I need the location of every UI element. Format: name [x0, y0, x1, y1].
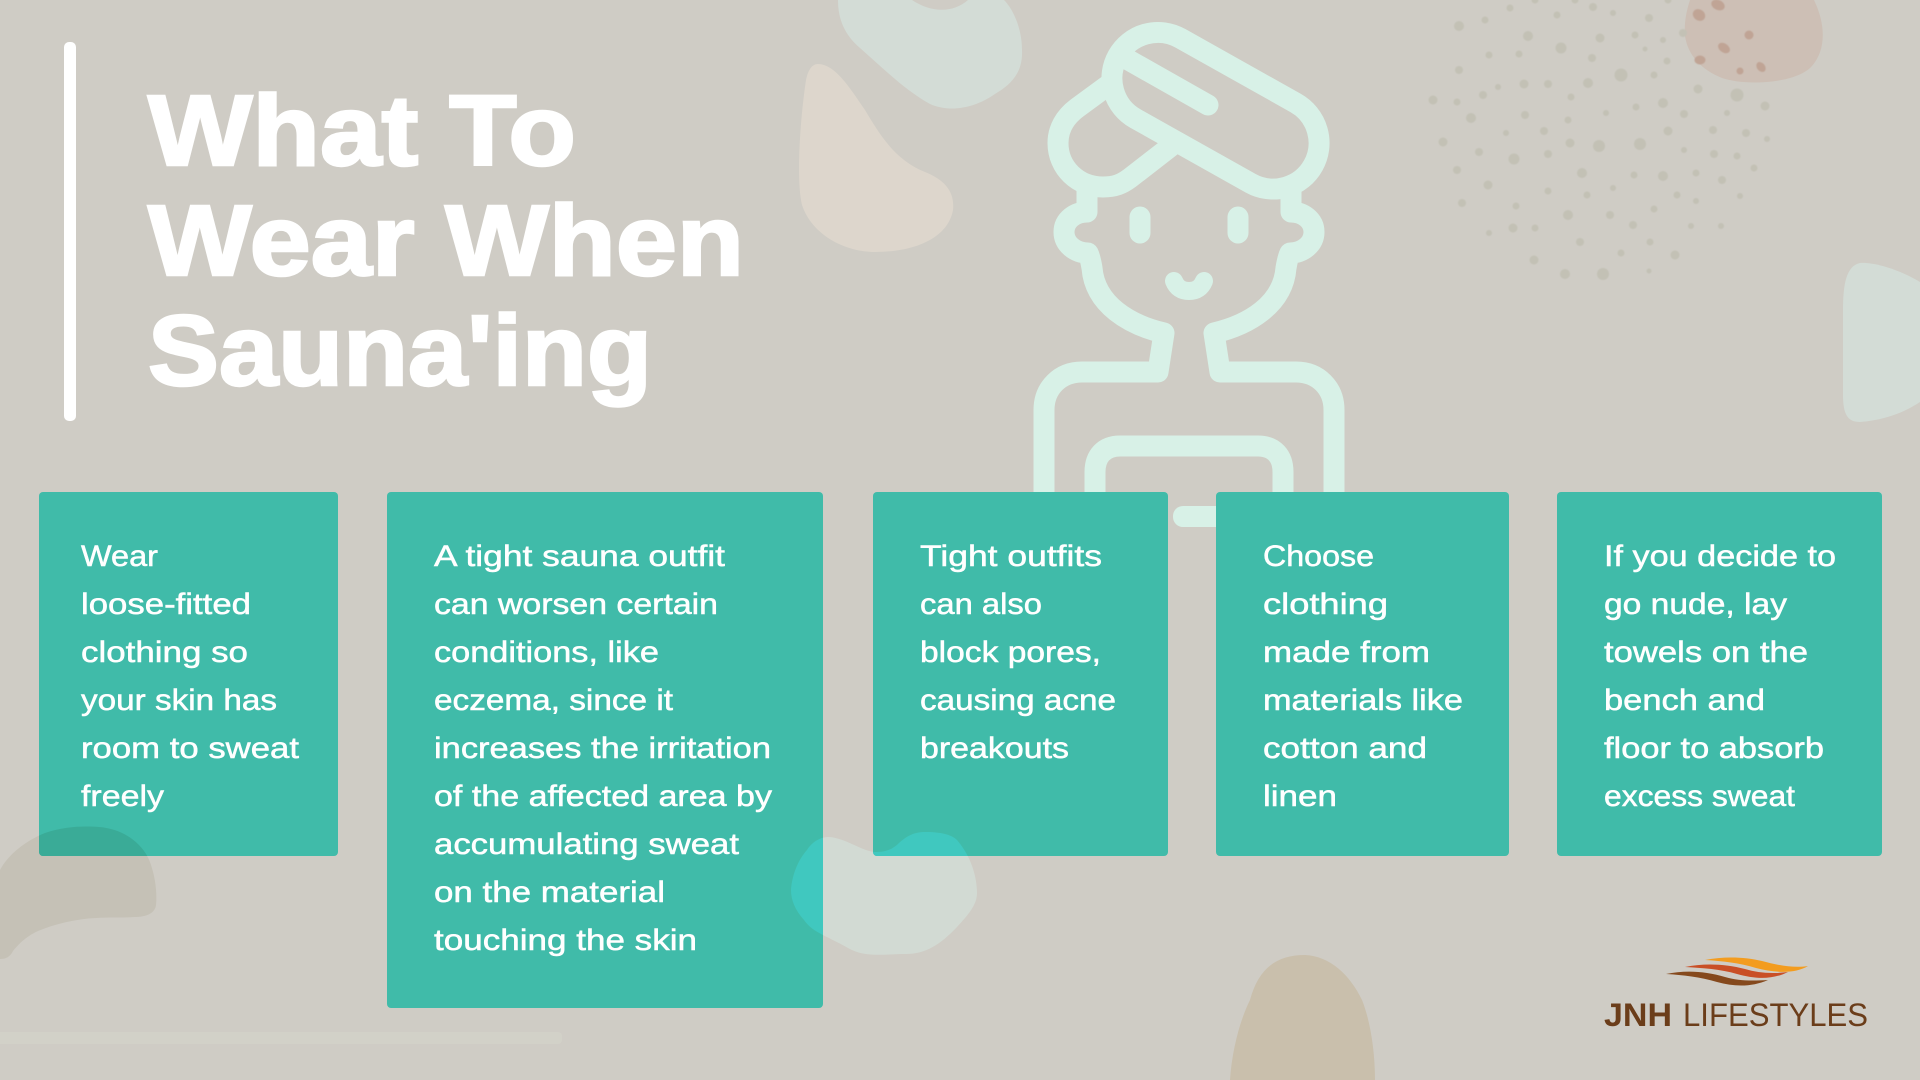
card 5: If you decide to	[1604, 540, 1836, 573]
title: What To	[148, 75, 576, 187]
logo: JNH Lifestyles	[1604, 957, 1868, 1033]
card 5	[1557, 492, 1882, 856]
card 4: cotton and	[1263, 732, 1427, 765]
card 2: can worsen certain	[434, 588, 718, 621]
card 5: go nude, lay	[1604, 588, 1787, 621]
card 1: loose-fitted	[81, 588, 251, 621]
logo waves	[1666, 957, 1808, 986]
towel bun	[1058, 86, 1170, 187]
card 3: causing acne	[920, 684, 1116, 717]
card 2: eczema, since it	[434, 684, 674, 717]
card 1: clothing so	[81, 636, 248, 669]
card 3: block pores,	[920, 636, 1101, 669]
blob: top right red	[1685, 0, 1823, 82]
card 2: increases the irritation	[434, 732, 771, 765]
blob: bottom left dark	[0, 827, 156, 959]
card 2: touching the skin	[434, 924, 697, 957]
title	[148, 75, 744, 407]
card 2: of the affected area by	[434, 780, 772, 813]
blob: top mint	[838, 0, 1022, 109]
title: Wear When	[148, 185, 744, 297]
card 3	[873, 492, 1168, 856]
card 1: Wear	[81, 540, 158, 573]
title: Sauna'ing	[148, 295, 652, 407]
blob: center mint	[791, 832, 977, 955]
card 1: freely	[81, 780, 164, 813]
laptop base	[1173, 506, 1233, 527]
card 4: materials like	[1263, 684, 1463, 717]
card 2	[387, 492, 823, 1008]
card 5: excess sweat	[1604, 780, 1796, 813]
card 4: clothing	[1263, 588, 1388, 621]
card 3: Tight outfits	[920, 540, 1102, 573]
face outline	[1044, 190, 1334, 500]
card 3: can also	[920, 588, 1042, 621]
card 2: on the material	[434, 876, 665, 909]
card 5: towels on the	[1604, 636, 1808, 669]
logo text	[1604, 997, 1868, 1033]
card 1: your skin has	[81, 684, 277, 717]
card 2: accumulating sweat	[434, 828, 740, 861]
card 5: floor to absorb	[1604, 732, 1824, 765]
blob overlap on cards: cyan	[791, 832, 968, 935]
card 1: room to sweat	[81, 732, 300, 765]
icon: person with towel	[1044, 16, 1336, 527]
eye right	[1228, 217, 1248, 233]
logo text: LIFESTYLES	[1683, 997, 1868, 1033]
towel wrap	[1095, 16, 1336, 206]
blob: bottom tan	[1230, 955, 1375, 1080]
card 2: A tight sauna outfit	[434, 540, 726, 573]
blob: beige	[799, 64, 953, 252]
bottom left bar	[0, 1032, 562, 1044]
blob overlap on cards: dark	[39, 826, 147, 856]
dot cluster	[1428, 0, 1770, 280]
card 4: made from	[1263, 636, 1430, 669]
smile	[1174, 281, 1204, 291]
card 4: Choose	[1263, 540, 1374, 573]
card 4: linen	[1263, 780, 1337, 813]
card 1	[39, 492, 338, 856]
logo text: JNH	[1604, 997, 1672, 1033]
laptop	[1095, 446, 1283, 500]
title accent bar	[64, 42, 76, 421]
card 2: conditions, like	[434, 636, 659, 669]
towel fold	[1125, 58, 1208, 105]
card 4	[1216, 492, 1509, 856]
card 3: breakouts	[920, 732, 1069, 765]
card 5: bench and	[1604, 684, 1765, 717]
blob: right mint	[1843, 263, 1920, 422]
eye left	[1130, 217, 1150, 233]
